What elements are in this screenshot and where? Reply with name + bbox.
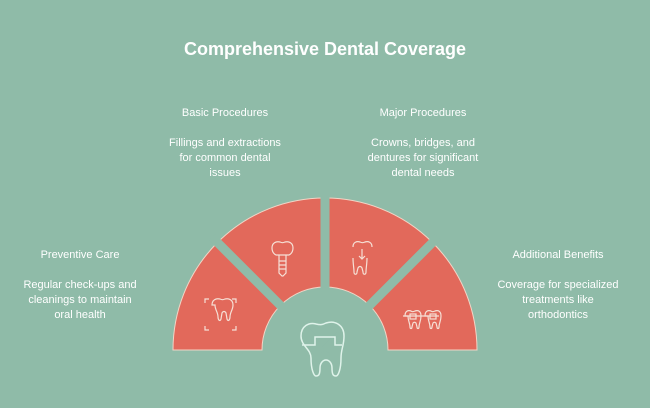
text: major procedures: dental needs: [392, 167, 454, 179]
text: additional benefits: Additional Benefits: [512, 249, 604, 261]
text: preventive care: Preventive Care: [41, 249, 119, 261]
icon: crown down: [353, 242, 372, 274]
icon: center tooth: [301, 322, 344, 376]
text: additional benefits: treatments like: [522, 294, 594, 306]
icon: tooth with scan corners: [205, 299, 236, 330]
text: additional benefits: [497, 249, 619, 321]
text: preventive care: Regular check-ups and: [23, 279, 137, 291]
text: major procedures: [368, 107, 478, 179]
text: preventive care: cleanings to maintain: [28, 294, 132, 306]
text: basic procedures: Fillings and extractions: [169, 137, 281, 149]
text: additional benefits: Coverage for specialized: [497, 279, 619, 291]
text: preventive care: oral health: [54, 309, 106, 321]
text: major procedures: Major Procedures: [380, 107, 466, 119]
text: major procedures: dentures for significant: [368, 152, 478, 164]
text: additional benefits: orthodontics: [528, 309, 588, 321]
text: basic procedures: for common dental: [179, 152, 271, 164]
title: Comprehensive Dental Coverage: [184, 39, 466, 59]
text: preventive care: [23, 249, 137, 321]
text: major procedures: Crowns, bridges, and: [371, 137, 475, 149]
icon: braces: [403, 311, 441, 328]
text: basic procedures: issues: [209, 167, 241, 179]
icon: implant: [272, 242, 293, 276]
text: basic procedures: Basic Procedures: [182, 107, 268, 119]
text: basic procedures: [169, 107, 281, 179]
